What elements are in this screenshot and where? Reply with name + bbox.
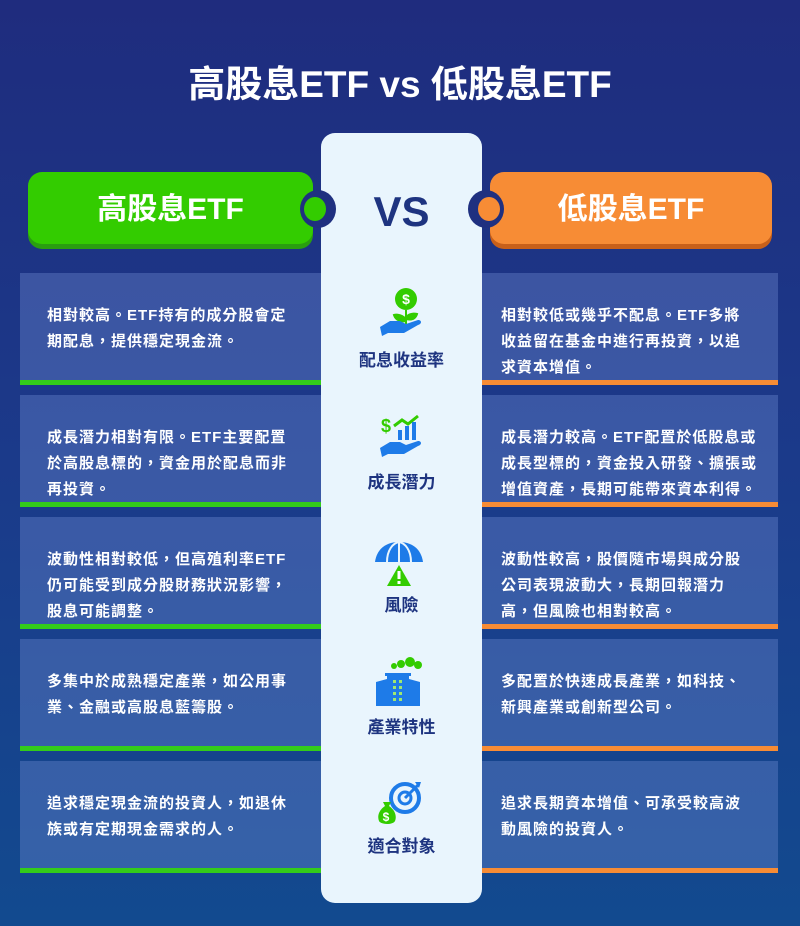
label: target investors: 適合對象 [368,837,436,856]
row 2 left [20,395,321,507]
row 3 left: 仍可能受到成分股財務狀況影響， [47,577,287,594]
row 3 left [20,517,321,629]
row 5 left [20,761,321,873]
row 2 left: 成長潛力相對有限。ETF主要配置 [47,429,286,446]
title: 高股息ETF vs 低股息ETF [188,64,612,105]
row 4 left: 多集中於成熟穩定產業，如公用事 [47,673,287,690]
row 2 left: 於高股息標的，資金用於配息而非 [47,455,287,472]
row 3 right: 高，但風險也相對較高。 [501,603,677,620]
header: high dividend [28,172,313,244]
icon: factory building [376,657,422,706]
row 2 right: 成長型標的，資金投入研發、擴張或 [501,455,757,472]
icon: growth: $ [381,416,391,436]
icon: money plant: $ [402,291,410,307]
icon: growth [380,414,421,457]
row 1 right: 相對較低或幾乎不配息。ETF多將 [501,307,740,324]
row 5 left: 追求穩定現金流的投資人，如退休 [47,795,287,812]
row 2 right [482,395,778,507]
header: high dividend: 高股息ETF [97,193,244,226]
row 4 right [482,639,778,751]
row 1 left [20,273,321,385]
knob right [468,190,504,228]
row 3 right [482,517,778,629]
row 2 right: 成長潛力較高。ETF配置於低股息或 [501,429,756,446]
row 4 right: 新興產業或創新型公司。 [501,699,677,716]
label: growth potential: 成長潛力 [368,473,436,492]
row 2 right: 增值資產，長期可能帶來資本利得。 [501,481,757,498]
row 4 right: 多配置於快速成長產業，如科技、 [501,673,741,690]
row 1 right: 求資本增值。 [501,359,597,376]
row 3 right: 波動性較高，股價隨市場與成分股 [501,551,741,568]
label: industry: 產業特性 [368,718,436,737]
row 5 right: 追求長期資本增值、可承受較高波 [501,795,741,812]
row 3 left: 股息可能調整。 [47,603,159,620]
icon: money plant [380,288,421,336]
row 3 right: 公司表現波動大，長期回報潛力 [501,577,725,594]
row 1 left: 相對較高。ETF持有的成分股會定 [47,307,286,324]
label: dividend yield: 配息收益率 [359,351,444,370]
icon: money bag target: $ [383,810,390,824]
icon: umbrella warning [375,542,423,586]
VS label: VS [373,188,430,235]
row 1 right: 收益留在基金中進行再投資，以追 [501,333,741,350]
label: risk: 風險 [384,596,418,615]
row 1 left: 期配息，提供穩定現金流。 [47,333,239,350]
row 3 left: 波動性相對較低，但高殖利率ETF [47,551,286,568]
center column [321,133,482,903]
row 5 right: 動風險的投資人。 [501,821,629,838]
icon: money bag target [378,782,421,824]
knob left [300,190,336,228]
row 4 left [20,639,321,751]
row 5 right [482,761,778,873]
row 1 right [482,273,778,385]
row 5 left: 族或有定期現金需求的人。 [47,821,239,838]
row 2 left: 再投資。 [47,481,111,498]
row 4 left: 業、金融或高股息藍籌股。 [47,699,239,716]
header: low dividend [490,172,772,244]
header: low dividend: 低股息ETF [558,193,704,226]
